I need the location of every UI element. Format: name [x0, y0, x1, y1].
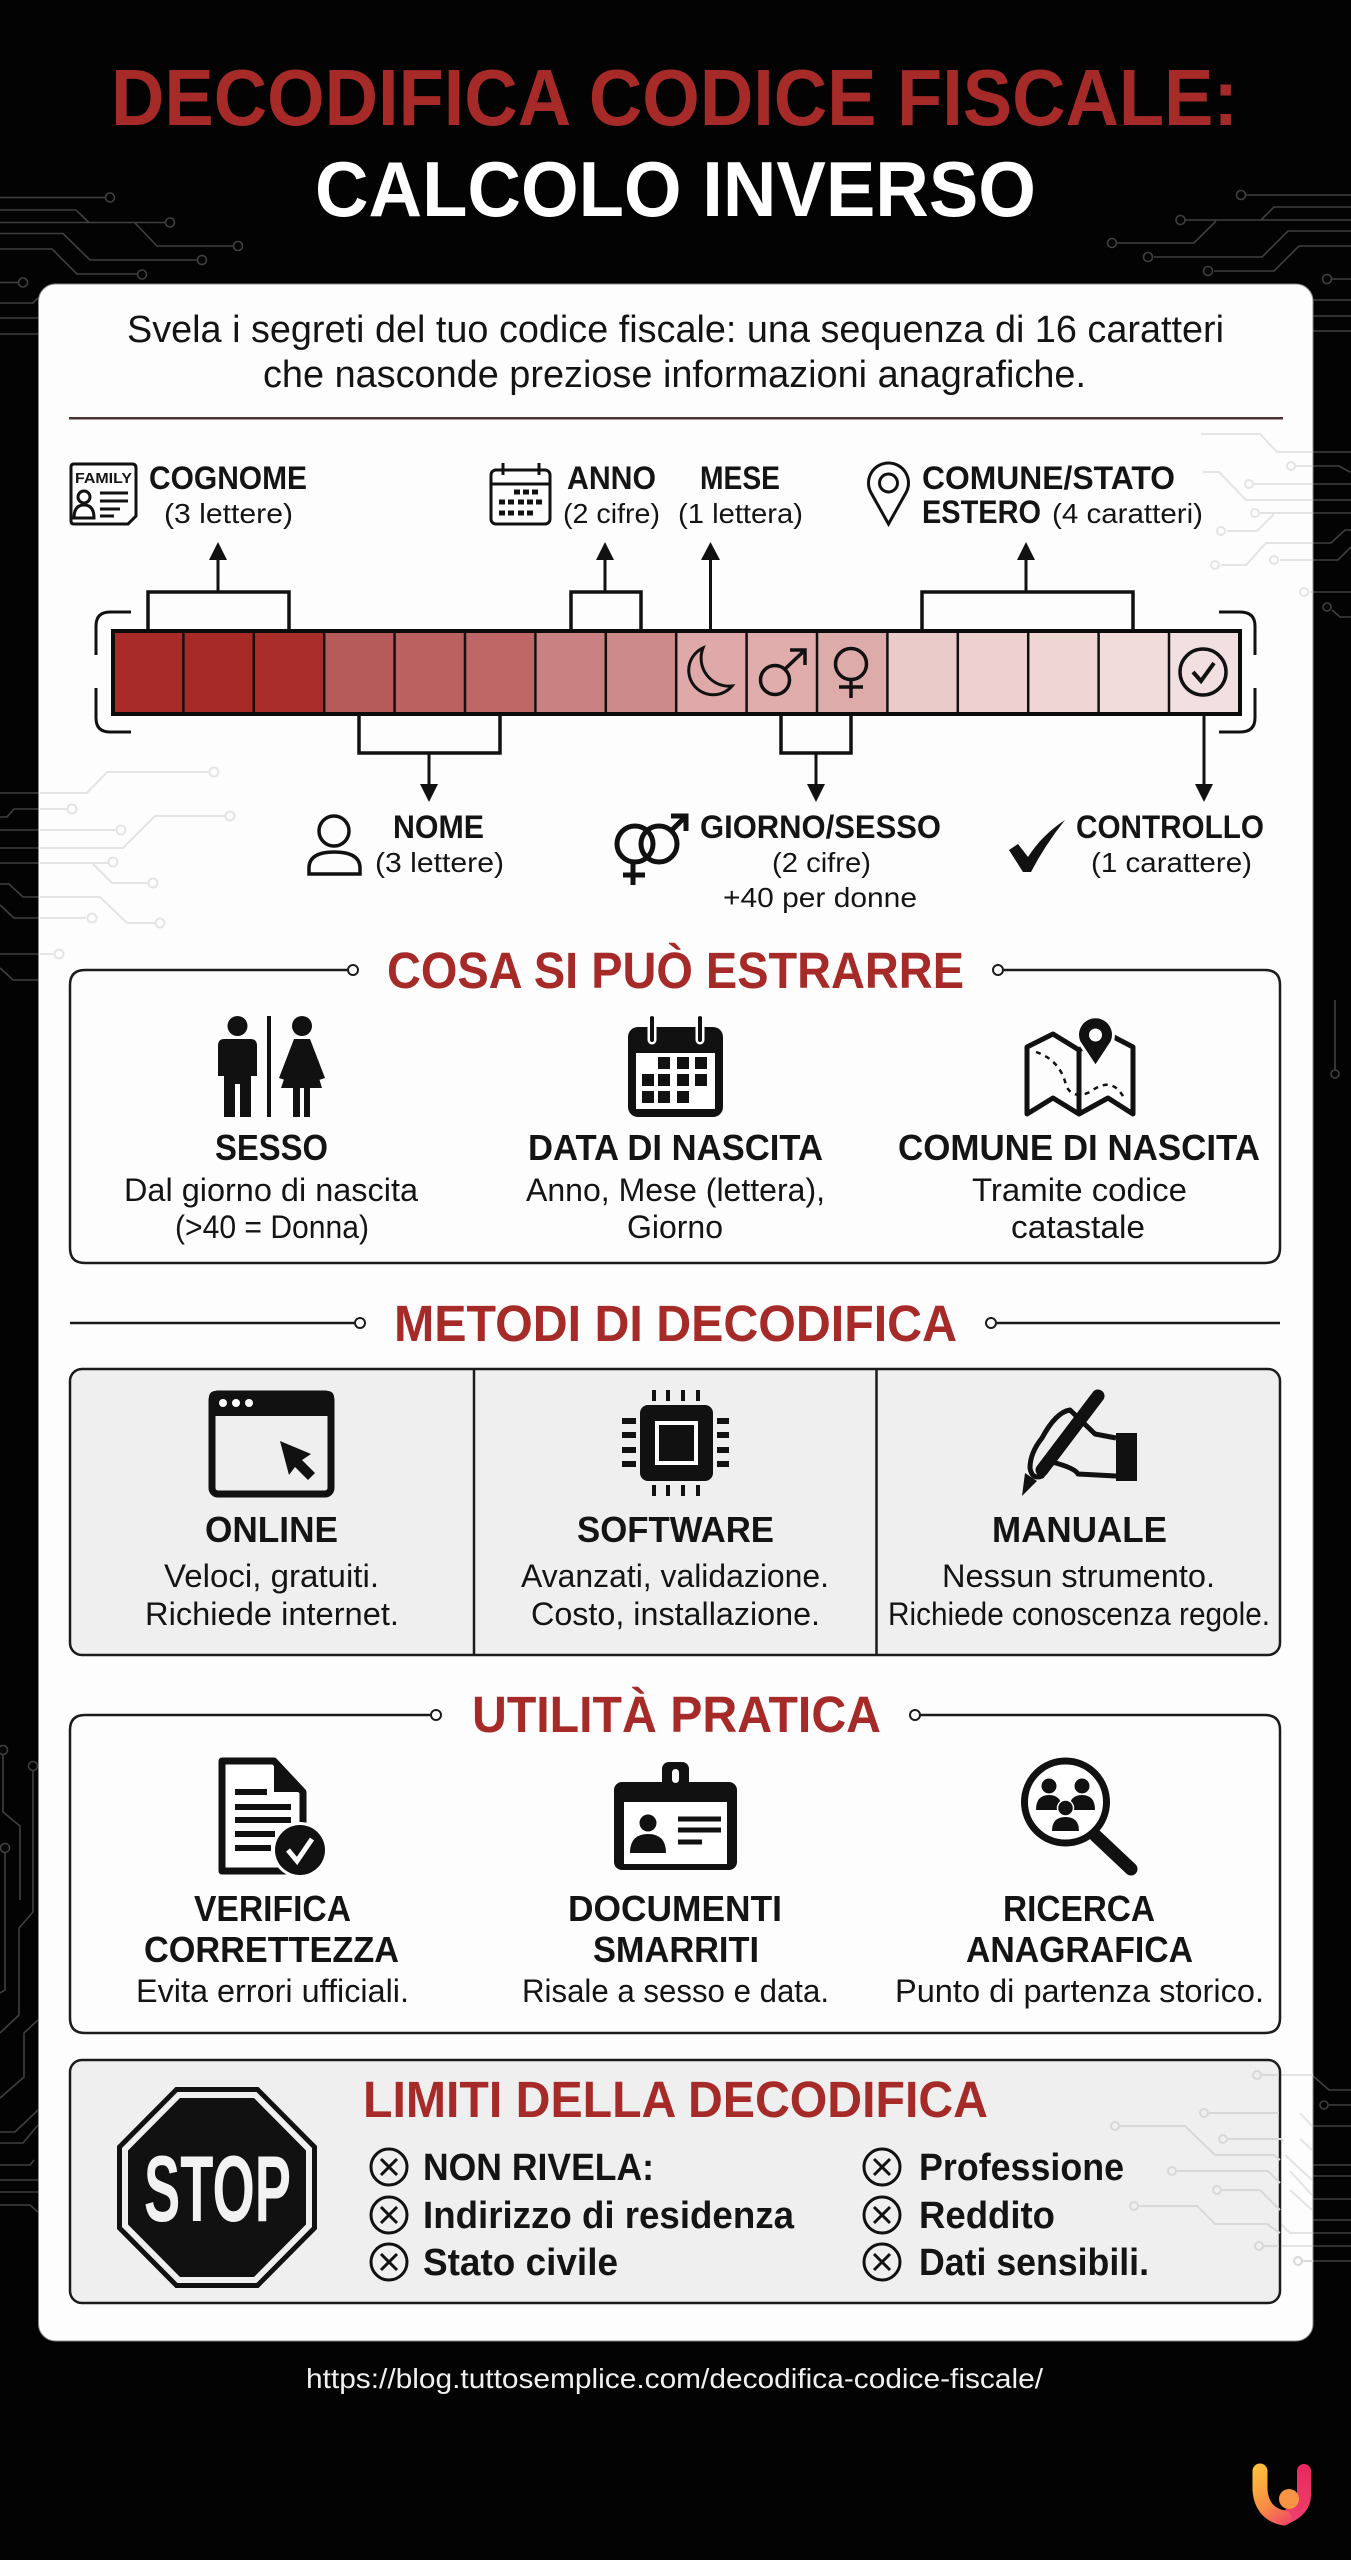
method: software: SOFTWARE	[577, 1509, 774, 1550]
icon: family document	[71, 464, 136, 524]
list: left column: Stato civile	[423, 2242, 618, 2284]
panel: limiti della decodifica	[70, 2060, 1313, 2303]
label: nome: (3 lettere)	[375, 847, 504, 878]
icon: location pin	[869, 463, 909, 524]
list: left column: NON RIVELA:	[423, 2147, 654, 2189]
subtitle text	[127, 309, 1224, 396]
code bar: 16 cells	[113, 631, 1240, 714]
item: data di nascita	[526, 1018, 825, 1245]
subtitle text: Svela i segreti del tuo codice fiscale: una sequenza di 16 caratteri	[127, 309, 1224, 351]
item: data di nascita: Giorno	[627, 1209, 723, 1245]
heading: UTILITÀ PRATICA	[472, 1686, 881, 1743]
logo	[1260, 2471, 1304, 2518]
icon: stop sign	[117, 2087, 317, 2288]
label: controllo: CONTROLLO	[1076, 809, 1264, 845]
item: data di nascita: Anno, Mese (lettera),	[526, 1172, 825, 1208]
item: sesso: SESSO	[215, 1127, 328, 1168]
icon: microchip	[622, 1390, 729, 1496]
title: DECODIFICA CODICE FISCALE:	[111, 53, 1238, 142]
list: right column: Dati sensibili.	[919, 2242, 1149, 2284]
panel: cosa si può estrarre	[70, 942, 1280, 1263]
icon: hand writing with pen	[1022, 1396, 1137, 1496]
method: manuale: Nessun strumento.	[942, 1558, 1215, 1594]
label: anno: (2 cifre)	[563, 498, 660, 529]
diagram: codice fiscale structure	[71, 460, 1264, 913]
icon: moon	[689, 648, 732, 695]
icon: document with check	[222, 1761, 328, 1878]
label: anno	[491, 460, 660, 529]
icon: check mark	[1009, 820, 1065, 872]
source url: https://blog.tuttosemplice.com/decodifica-codice-fiscale/	[306, 2363, 1043, 2394]
item: verifica correttezza: VERIFICA	[194, 1888, 351, 1929]
method: manuale: Richiede conoscenza regole.	[888, 1596, 1270, 1632]
icon: calendar	[628, 1018, 723, 1117]
icon: man and woman	[218, 1016, 325, 1117]
list: left column: Indirizzo di residenza	[423, 2195, 795, 2237]
panel: utilità pratica	[70, 1686, 1280, 2033]
label: anno: ANNO	[567, 460, 656, 496]
label: giorno/sesso: GIORNO/SESSO	[700, 809, 941, 845]
item: comune di nascita: COMUNE DI NASCITA	[898, 1127, 1260, 1168]
label: mese: MESE	[700, 460, 780, 496]
list: right column: Reddito	[919, 2195, 1055, 2237]
label: comune/stato estero: (4 caratteri)	[1052, 498, 1203, 529]
item: ricerca anagrafica	[895, 1761, 1264, 2009]
label: nome	[309, 809, 504, 878]
list: left column	[371, 2147, 795, 2284]
item: sesso: (>40 = Donna)	[175, 1209, 369, 1245]
label: giorno/sesso: (2 cifre)	[772, 847, 871, 878]
title: CALCOLO INVERSO	[315, 145, 1036, 233]
icon: person	[309, 816, 360, 874]
method: online: ONLINE	[205, 1509, 338, 1550]
method: software: Costo, installazione.	[531, 1596, 820, 1632]
label: controllo: (1 carattere)	[1091, 847, 1252, 878]
panel: metodi di decodifica	[70, 1369, 1280, 1655]
item: sesso	[124, 1016, 418, 1245]
method: online	[145, 1391, 399, 1632]
label: cognome	[71, 460, 307, 529]
title	[111, 53, 1238, 233]
method: online: Veloci, gratuiti.	[164, 1558, 379, 1594]
item: comune di nascita	[898, 1017, 1260, 1245]
panel: main card	[38, 284, 1313, 2341]
label: controllo	[1009, 809, 1264, 878]
item: ricerca anagrafica: ANAGRAFICA	[966, 1929, 1193, 1970]
item: ricerca anagrafica: Punto di partenza storico.	[895, 1973, 1264, 2009]
item: verifica correttezza: Evita errori ufficiali.	[136, 1973, 409, 2009]
outer brackets	[96, 612, 1255, 732]
label: mese	[678, 460, 803, 529]
method: manuale	[888, 1396, 1270, 1632]
heading: LIMITI DELLA DECODIFICA	[363, 2071, 988, 2128]
icon: check in circle	[1180, 649, 1226, 695]
method: manuale: MANUALE	[992, 1509, 1167, 1550]
item: comune di nascita: Tramite codice	[972, 1172, 1187, 1208]
heading: COSA SI PUÒ ESTRARRE	[387, 942, 964, 999]
item: verifica correttezza: CORRETTEZZA	[144, 1929, 399, 1970]
label: cognome: COGNOME	[149, 460, 307, 496]
icon: male symbol	[760, 650, 805, 694]
item: documenti smarriti: Risale a sesso e data.	[522, 1973, 829, 2009]
icon: browser window	[209, 1391, 334, 1494]
heading: metodi di decodifica	[70, 1295, 1280, 1352]
item: documenti smarriti: DOCUMENTI	[568, 1888, 782, 1929]
label: cognome: (3 lettere)	[164, 498, 293, 529]
item: sesso: Dal giorno di nascita	[124, 1172, 418, 1208]
list: right column	[864, 2147, 1149, 2284]
method: software	[521, 1390, 829, 1632]
icon: family document: FAMILY	[75, 470, 132, 487]
label: comune/stato estero: COMUNE/STATO	[922, 460, 1175, 496]
item: documenti smarriti: SMARRITI	[593, 1929, 759, 1970]
label: nome: NOME	[393, 809, 484, 845]
label: comune/stato estero	[869, 460, 1203, 530]
heading: metodi di decodifica: METODI DI DECODIFICA	[394, 1295, 957, 1352]
label: mese: (1 lettera)	[678, 498, 803, 529]
item: documenti smarriti	[522, 1762, 829, 2009]
item: data di nascita: DATA DI NASCITA	[528, 1127, 823, 1168]
label: giorno/sesso	[617, 809, 941, 913]
label: giorno/sesso: +40 per donne	[723, 882, 917, 913]
connectors and arrows	[148, 542, 1213, 802]
icon: gender symbols	[617, 816, 686, 885]
subtitle text: che nasconde preziose informazioni anagrafiche.	[263, 354, 1086, 396]
list: right column: Professione	[919, 2147, 1124, 2189]
method: online: Richiede internet.	[145, 1596, 399, 1632]
method: software: Avanzati, validazione.	[521, 1558, 829, 1594]
icon: calendar outline	[491, 463, 550, 524]
label: comune/stato estero: ESTERO	[922, 494, 1041, 530]
item: comune di nascita: catastale	[1011, 1209, 1145, 1245]
icon: id badge	[614, 1762, 737, 1870]
icon: stop sign: STOP	[144, 2136, 291, 2241]
icon: magnifier with people	[1024, 1761, 1131, 1869]
icon: map with pin	[1027, 1017, 1133, 1114]
item: ricerca anagrafica: RICERCA	[1003, 1888, 1155, 1929]
item: verifica correttezza	[136, 1761, 409, 2009]
icon: female symbol	[836, 648, 866, 698]
